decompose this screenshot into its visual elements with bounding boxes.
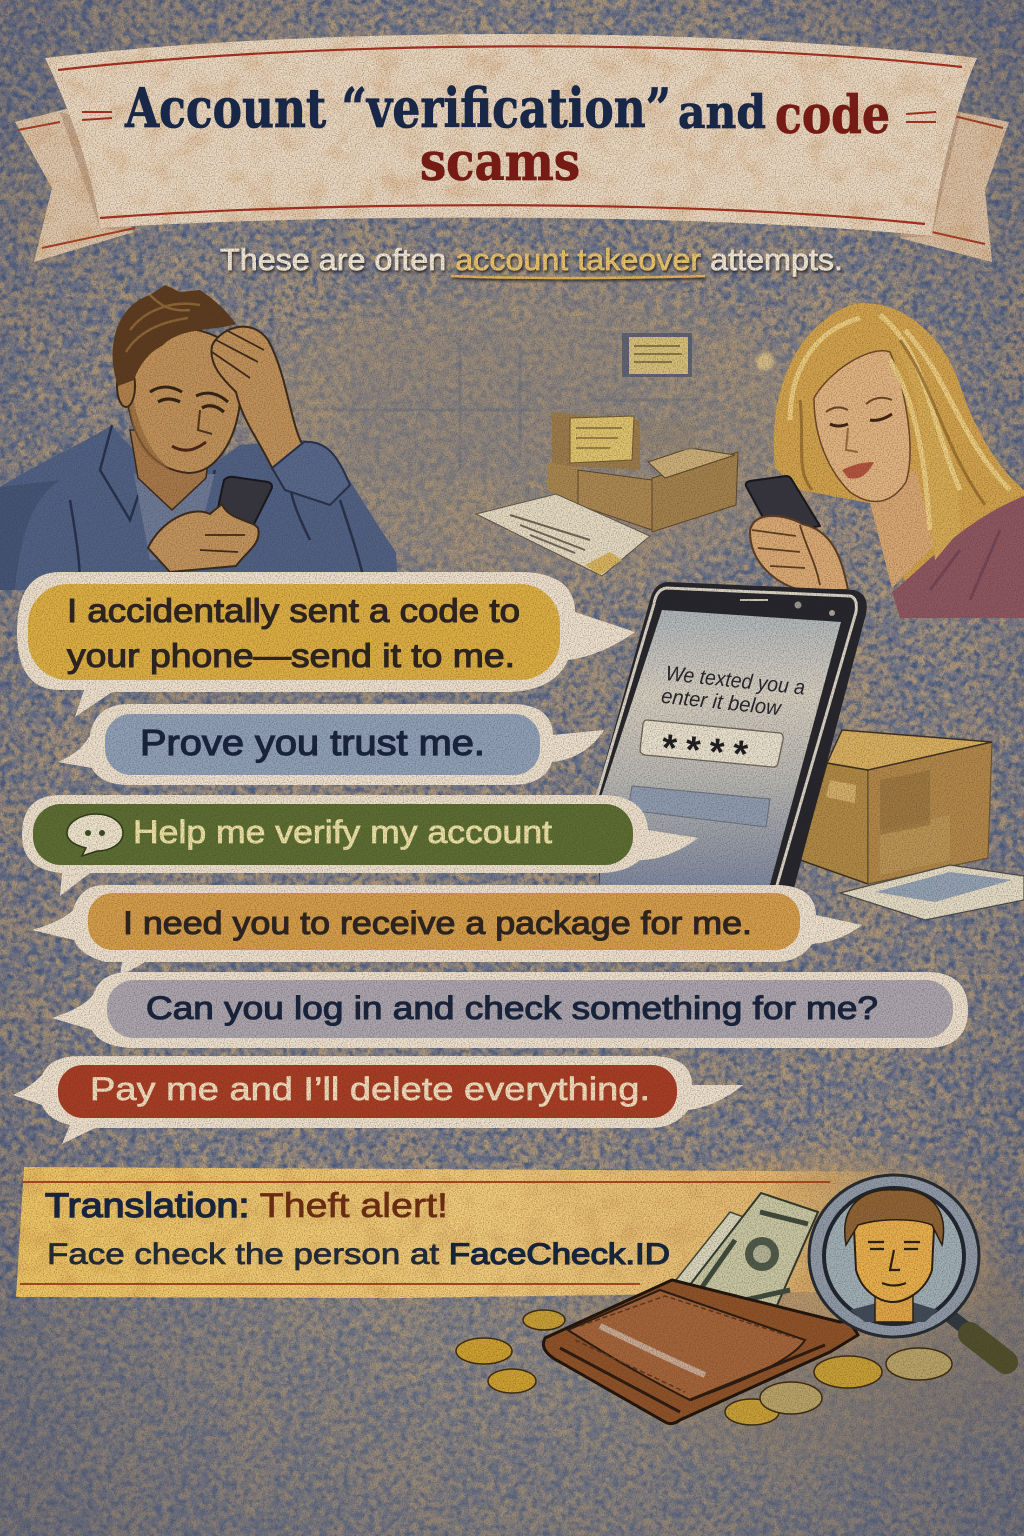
- raised arm and hand: [211, 327, 302, 468]
- face: [854, 1207, 934, 1302]
- speech bubble 2: blue: Prove you trust me.: [140, 722, 485, 763]
- handle: [950, 1316, 968, 1330]
- man looking at phone: [0, 285, 398, 590]
- facial features: [150, 387, 228, 402]
- top: [892, 496, 1024, 618]
- papers: [476, 494, 650, 576]
- speech bubble 5: mauve: Can you log in and check something for me?: [146, 990, 878, 1026]
- speech bubble 4: orange: [32, 885, 862, 976]
- hands: [750, 516, 848, 590]
- speech bubble 6: red: [13, 1056, 743, 1144]
- title text: Account “verification”: [124, 76, 671, 140]
- title text: [124, 76, 890, 193]
- magnifying glass with face: [809, 1175, 1006, 1362]
- front hair strands: [895, 345, 960, 560]
- features: [868, 1242, 920, 1286]
- subtitle: These are often account takeover attempts.: [220, 242, 843, 277]
- title text: code: [775, 85, 890, 146]
- big phone with code screen: [596, 582, 867, 892]
- neck: [875, 1285, 913, 1322]
- phone: [212, 477, 272, 538]
- title text: scams: [420, 132, 580, 193]
- screen text: We texted you a: [664, 662, 806, 700]
- phone: [746, 476, 820, 534]
- neck: [130, 430, 212, 510]
- speech bubble 5: mauve: [52, 972, 968, 1048]
- title text: and: [678, 85, 766, 139]
- neck: [868, 470, 934, 588]
- face: [814, 351, 910, 501]
- main ribbon: [45, 34, 977, 236]
- face: [124, 328, 240, 473]
- wall note: [622, 333, 692, 377]
- code input box: ****: [660, 727, 758, 777]
- holding hand: [148, 504, 259, 572]
- cardboard box by phone: [800, 730, 992, 884]
- stack of boxes: [548, 412, 738, 532]
- faint shelves: [350, 330, 640, 480]
- lens rim: [809, 1175, 979, 1337]
- glow: [756, 353, 774, 371]
- shirt: [0, 425, 398, 590]
- speech bubble 4: orange: I need you to receive a package for me.: [123, 905, 752, 941]
- coins: [456, 1310, 952, 1425]
- translation banner: [10, 1160, 980, 1340]
- banknotes in wallet: [672, 1193, 818, 1310]
- speech bubble 1: yellow: [17, 572, 635, 717]
- banner text line 2: Face check the person at FaceCheck.ID: [47, 1238, 670, 1271]
- speech bubble 6: red: Pay me and I’ll delete everything.: [90, 1071, 650, 1107]
- shoulders: [850, 1302, 938, 1322]
- title ribbon: [10, 20, 1014, 265]
- hair back: [774, 303, 1024, 582]
- button bar: [628, 786, 770, 827]
- wallet: [543, 1280, 858, 1424]
- screen text: [660, 662, 806, 722]
- speech bubble 2: blue: [58, 704, 604, 785]
- hair: [113, 285, 236, 386]
- speech bubble 1: yellow: I accidentally sent a code to: [67, 592, 520, 629]
- banner text line 1: Translation: Theft alert!: [45, 1187, 448, 1225]
- hair: [845, 1190, 944, 1245]
- speech bubble 3: green: Help me verify my account: [133, 814, 552, 850]
- screen text: enter it below: [660, 685, 784, 720]
- banknote stack: [840, 865, 1024, 920]
- code input box: [640, 720, 783, 777]
- screen: [600, 610, 841, 892]
- left ribbon tail: [15, 108, 134, 262]
- icon: speech dots: [67, 814, 123, 856]
- facial features: [826, 398, 892, 412]
- woman looking at phone: [746, 303, 1024, 618]
- scene backdrop: shelves, note, boxes: [340, 330, 774, 576]
- right ribbon tail: [900, 105, 1009, 262]
- tee: [134, 474, 215, 560]
- speech bubble 3: green: [22, 795, 698, 896]
- speech bubble 1: yellow: your phone—send it to me.: [67, 637, 515, 674]
